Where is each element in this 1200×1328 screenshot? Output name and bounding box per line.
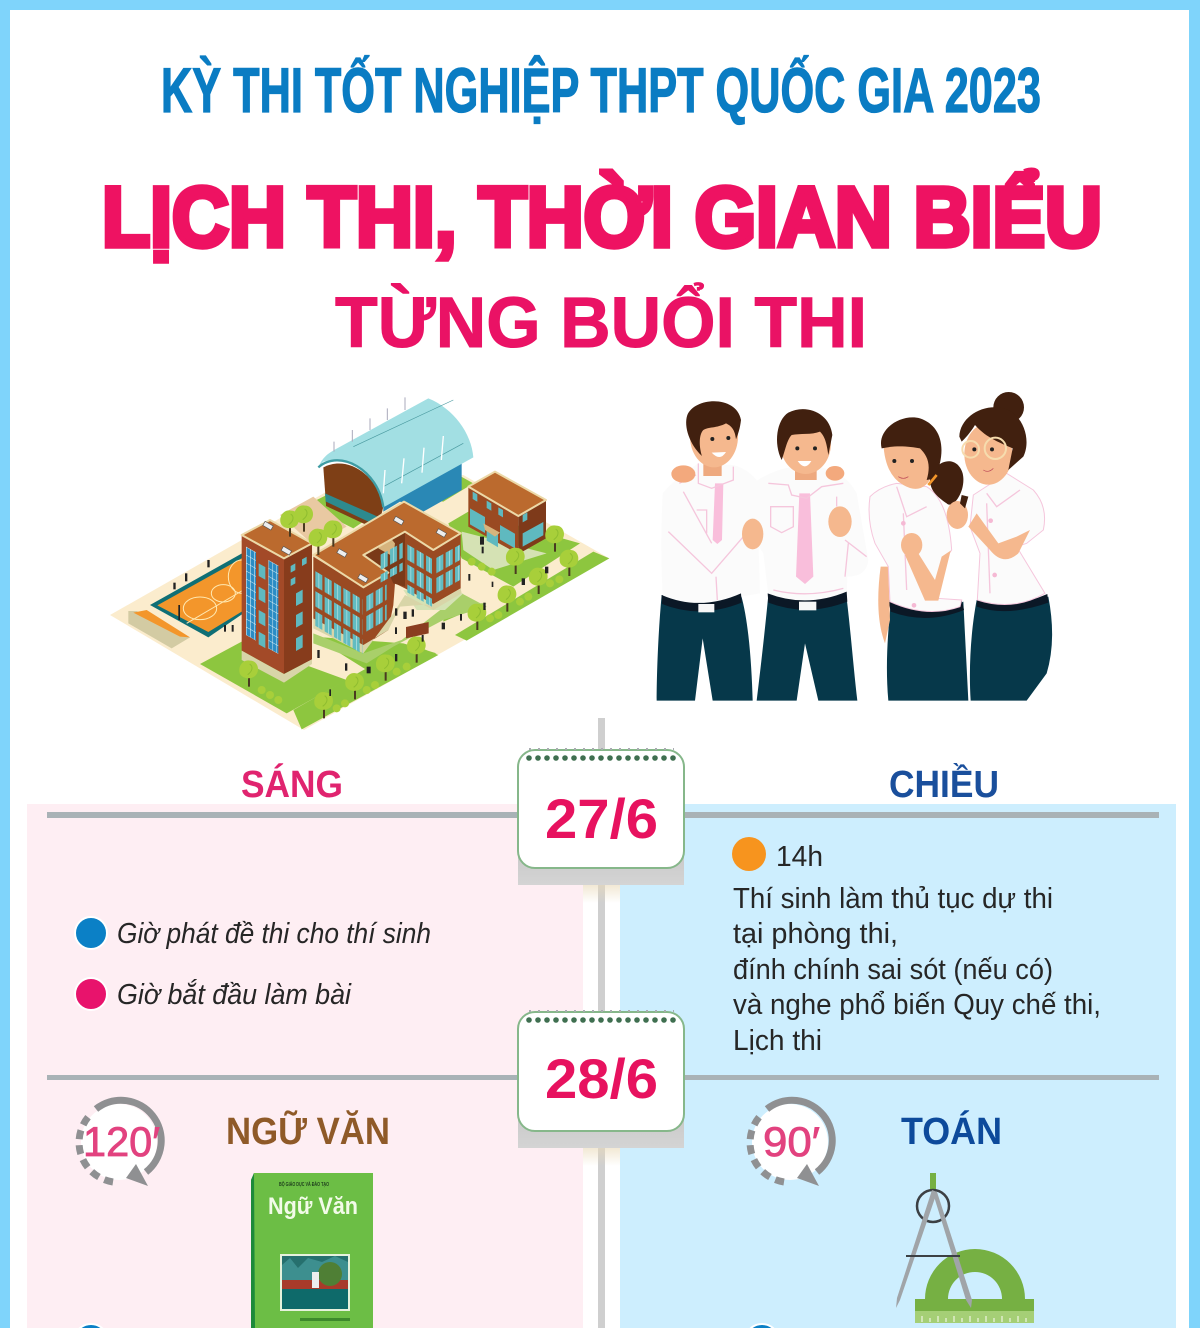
bullet: morning next item: [74, 1324, 108, 1328]
subject heading: literature: NGỮ VĂN: [226, 1109, 390, 1153]
main building: [313, 532, 461, 646]
student 3: [869, 417, 968, 701]
trees: [294, 505, 313, 532]
heading: morning: SÁNG: [241, 762, 343, 806]
text block: 14h procedure: Lịch thi: [733, 1025, 822, 1057]
heading: afternoon: CHIỀU: [889, 762, 999, 806]
text block: 14h procedure: [732, 837, 1101, 1057]
text block: 14h procedure: và nghe phổ biến Quy chế thi,: [733, 989, 1101, 1021]
student 1: [657, 401, 760, 701]
calendar: 28/6: 28/6: [545, 1047, 658, 1110]
text block: 14h procedure: 14h: [776, 841, 823, 873]
subheading: each session: TỪNG BUỔI THI: [335, 283, 867, 363]
icon: protractor and compass: [896, 1173, 1034, 1323]
timer: 90 minutes: 90′: [763, 1118, 820, 1165]
timeline: divider 27/6: [47, 812, 1159, 818]
panel: afternoon background: [620, 804, 1176, 1328]
text block: 14h procedure: đính chính sai sót (nếu có): [733, 954, 1053, 986]
small building: [468, 487, 518, 554]
icon: literature textbook: BỘ GIÁO DỤC VÀ ĐÀO TẠO: [279, 1180, 329, 1188]
icon: literature textbook: Ngữ Văn: [268, 1193, 358, 1220]
timer: 120 minutes: [79, 1100, 161, 1186]
corner tower: [242, 535, 284, 674]
legend: exam paper time: Giờ phát đề thi cho thí sinh: [117, 918, 431, 950]
illustration: isometric school campus: [110, 397, 609, 730]
basketball court: [150, 553, 243, 637]
subject heading: math: TOÁN: [901, 1109, 1002, 1153]
calendar: 28/6: [518, 1011, 684, 1166]
illustration: four students: [657, 392, 1052, 701]
bullet: afternoon next item: [745, 1324, 779, 1328]
timeline: divider 28/6: [47, 1075, 1159, 1080]
icon: literature textbook: [251, 1173, 373, 1328]
gym hall: [323, 463, 383, 524]
calendar: 27/6: [518, 749, 684, 903]
timeline: vertical axis: [598, 718, 605, 1328]
calendar: 27/6: 27/6: [545, 787, 658, 850]
student 2: [742, 409, 868, 701]
legend: exam start time: Giờ bắt đầu làm bài: [117, 978, 352, 1011]
timer: 120 minutes: 120′: [83, 1118, 160, 1165]
timer: 90 minutes: [750, 1100, 832, 1186]
panel: morning background: [27, 804, 583, 1328]
student 4: [947, 392, 1052, 701]
text block: 14h procedure: Thí sinh làm thủ tục dự thi: [733, 883, 1053, 915]
text block: 14h procedure: tại phòng thi,: [733, 918, 898, 950]
ground: [110, 475, 609, 730]
heading: schedule: LỊCH THI, THỜI GIAN BIỂU: [102, 170, 1102, 264]
